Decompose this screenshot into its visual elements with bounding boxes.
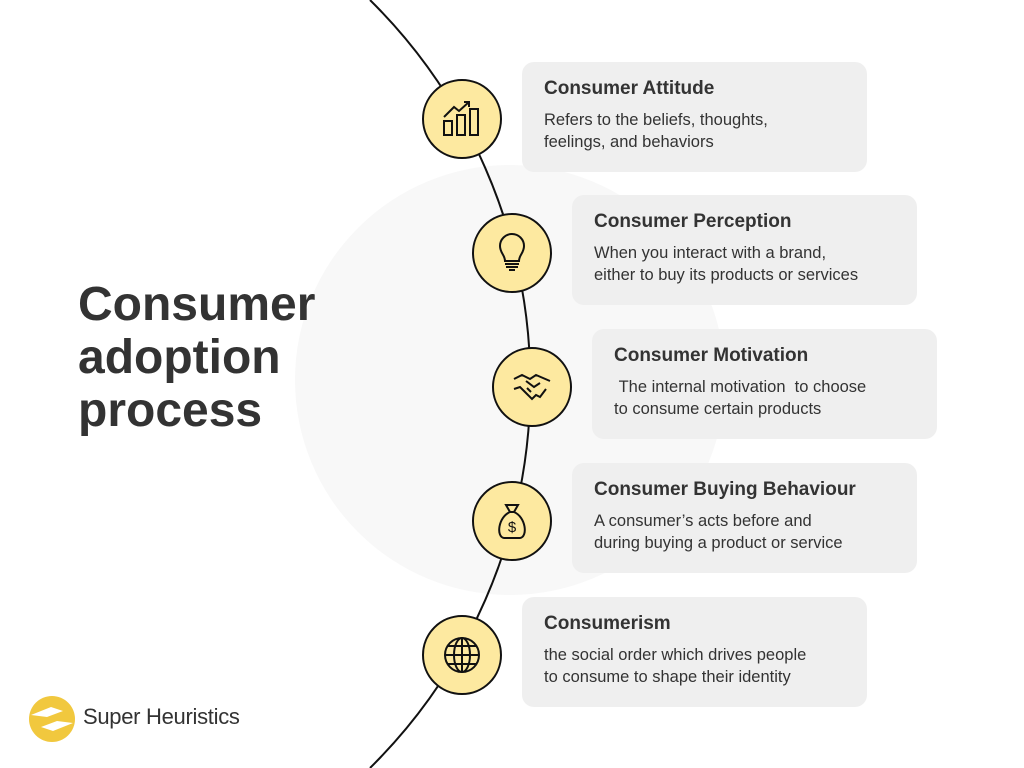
logo <box>29 696 240 742</box>
title: Consumer <box>78 278 315 331</box>
panel: perception <box>572 195 917 305</box>
panel: attitude: feelings, and behaviors <box>544 133 714 151</box>
title <box>78 278 315 437</box>
panel: consumerism <box>522 597 867 707</box>
panel: motivation <box>592 329 937 439</box>
panel: consumerism: Consumerism <box>544 613 671 634</box>
watermark background <box>295 165 725 595</box>
icon: chart <box>422 79 502 159</box>
panel: consumerism: to consume to shape their identity <box>544 668 791 686</box>
panel: perception: either to buy its products or services <box>594 266 858 284</box>
title: adoption <box>78 331 281 384</box>
icon: globe <box>422 615 502 695</box>
panel: motivation: The internal motivation to choose <box>619 378 866 396</box>
icon: money bag: $ <box>508 519 517 536</box>
logo: Super Heuristics <box>83 704 240 729</box>
panel: motivation: to consume certain products <box>614 400 821 418</box>
icon: bulb <box>472 213 552 293</box>
panel: perception: Consumer Perception <box>594 211 791 232</box>
panel: attitude <box>522 62 867 172</box>
panel: attitude: Consumer Attitude <box>544 78 714 99</box>
panel: consumerism: the social order which drives people <box>544 646 806 664</box>
icon: money bag <box>472 481 552 561</box>
panel: buying behaviour: Consumer Buying Behaviour <box>594 479 856 500</box>
panel: perception: When you interact with a brand, <box>594 244 826 262</box>
title: process <box>78 384 262 437</box>
panel: buying behaviour: A consumer’s acts before and <box>594 512 812 530</box>
panel: motivation: Consumer Motivation <box>614 345 808 366</box>
panel: buying behaviour <box>572 463 917 573</box>
icon: handshake <box>492 347 572 427</box>
panel: attitude: Refers to the beliefs, thoughts, <box>544 111 768 129</box>
panel: buying behaviour: during buying a product or service <box>594 534 843 552</box>
